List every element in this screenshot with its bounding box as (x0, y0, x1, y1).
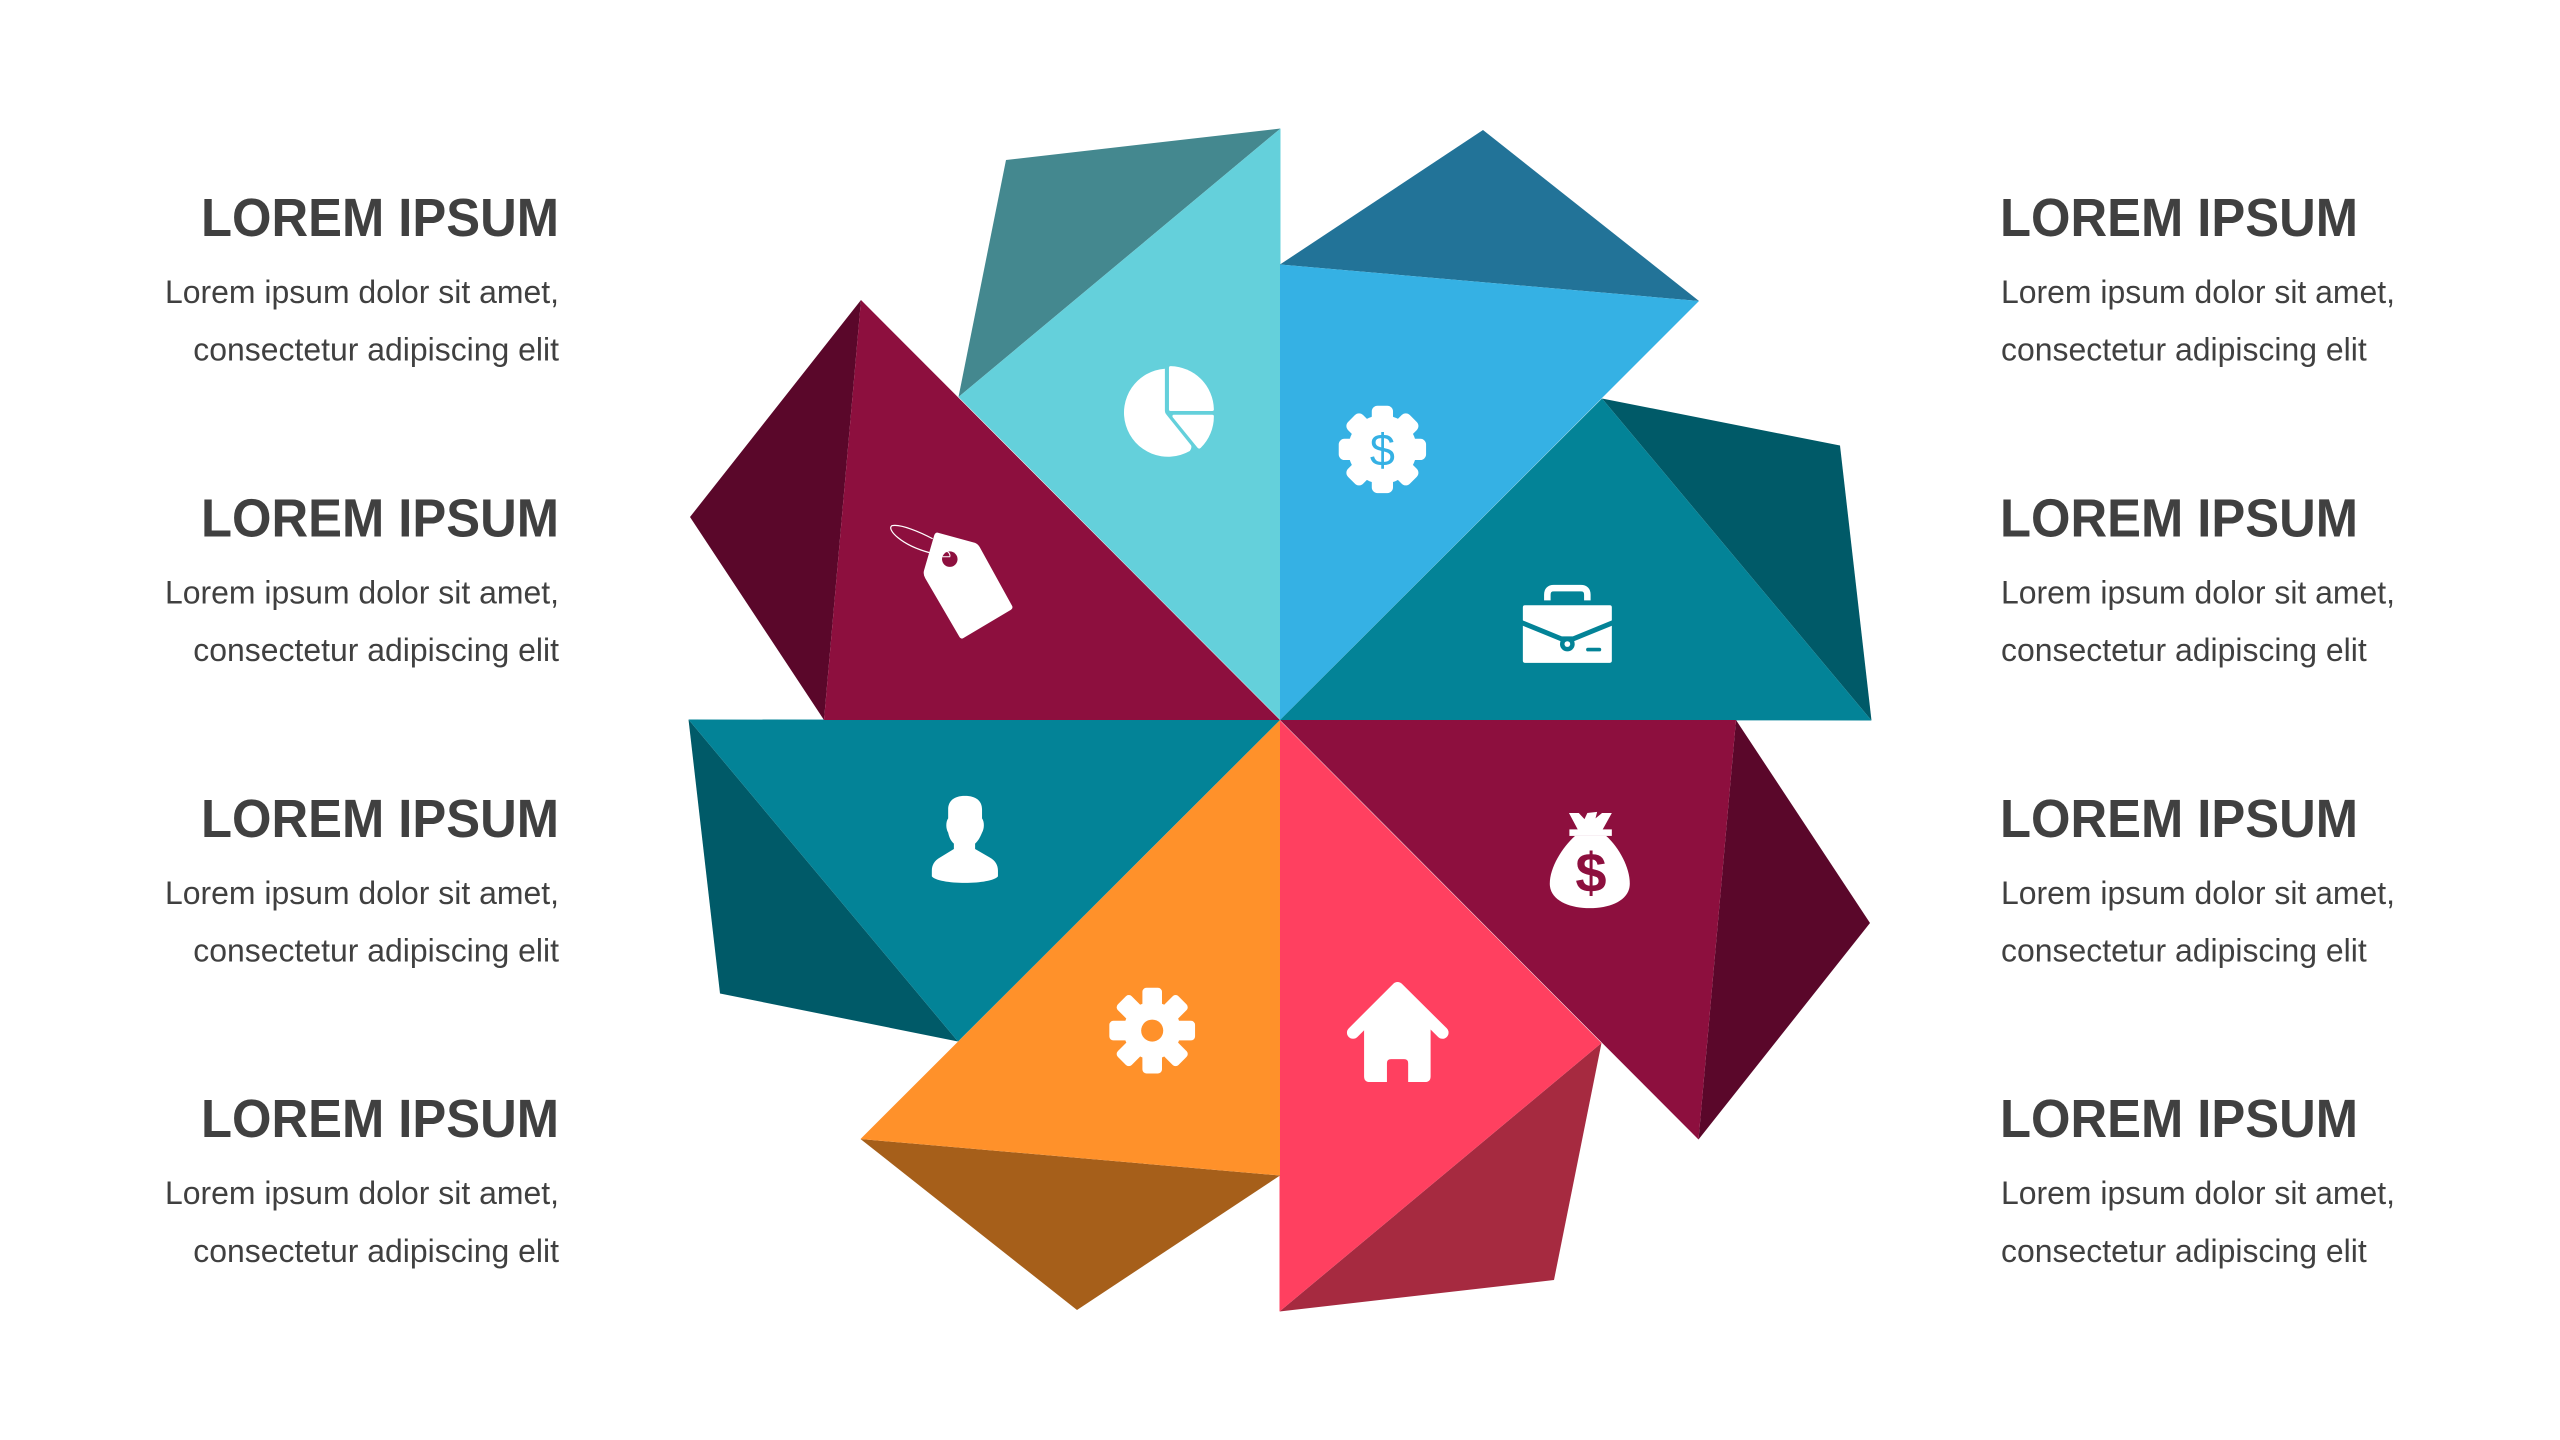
body line 1: Lorem ipsum dolor sit amet, (2001, 1175, 2395, 1211)
segment: orange gear (860, 720, 1280, 1310)
text block: right 2 (2000, 488, 2395, 668)
pinwheel diagram (688, 128, 1872, 1312)
body line 1: Lorem ipsum dolor sit amet, (165, 274, 559, 310)
heading: LOREM IPSUM (201, 188, 559, 248)
body line 2: consectetur adipiscing elit (193, 332, 559, 368)
heading: LOREM IPSUM (2000, 789, 2358, 849)
segment: crimson price tag (690, 300, 1280, 720)
text block: right 1 (2000, 188, 2395, 368)
body line 1: Lorem ipsum dolor sit amet, (165, 875, 559, 911)
icon: pie chart (1124, 366, 1214, 457)
heading: LOREM IPSUM (2000, 488, 2358, 548)
icon: gear (1109, 988, 1195, 1073)
text block: left 1 (165, 188, 559, 368)
body line 2: consectetur adipiscing elit (193, 932, 559, 968)
text block: left 2 (165, 488, 559, 668)
body line 1: Lorem ipsum dolor sit amet, (2001, 574, 2395, 610)
segment: teal person (688, 720, 1280, 1042)
body line 1: Lorem ipsum dolor sit amet, (2001, 875, 2395, 911)
segment: blue gear dollar (1280, 130, 1699, 720)
icon: money bag (1550, 812, 1630, 908)
text block: right 4 (2000, 1089, 2395, 1269)
body line 2: consectetur adipiscing elit (2001, 932, 2367, 968)
segment: cyan pie chart (958, 128, 1280, 720)
body line 2: consectetur adipiscing elit (2001, 332, 2367, 368)
body line 1: Lorem ipsum dolor sit amet, (2001, 274, 2395, 310)
body line 2: consectetur adipiscing elit (193, 1233, 559, 1269)
body line 2: consectetur adipiscing elit (2001, 1233, 2367, 1269)
icon: gear with dollar (1339, 406, 1426, 493)
icon: price tag (891, 525, 1012, 639)
segment: teal briefcase (1280, 398, 1872, 720)
text block: left 3 (165, 789, 559, 968)
segment: crimson money bag (1280, 720, 1870, 1140)
icon: briefcase (1521, 588, 1613, 663)
icon: money bag: $ (1575, 841, 1607, 904)
body line 1: Lorem ipsum dolor sit amet, (165, 574, 559, 610)
body line 2: consectetur adipiscing elit (193, 632, 559, 668)
heading: LOREM IPSUM (201, 1089, 559, 1149)
heading: LOREM IPSUM (201, 789, 559, 849)
icon: gear with dollar: $ (1370, 424, 1395, 476)
body line 2: consectetur adipiscing elit (2001, 632, 2367, 668)
body line 1: Lorem ipsum dolor sit amet, (165, 1175, 559, 1211)
heading: LOREM IPSUM (201, 488, 559, 548)
segment: red house (1280, 720, 1602, 1312)
text block: left 4 (165, 1089, 559, 1269)
icon: house (1353, 988, 1442, 1082)
text block: right 3 (2000, 789, 2395, 968)
icon: person (932, 796, 998, 883)
heading: LOREM IPSUM (2000, 1089, 2358, 1149)
heading: LOREM IPSUM (2000, 188, 2358, 248)
